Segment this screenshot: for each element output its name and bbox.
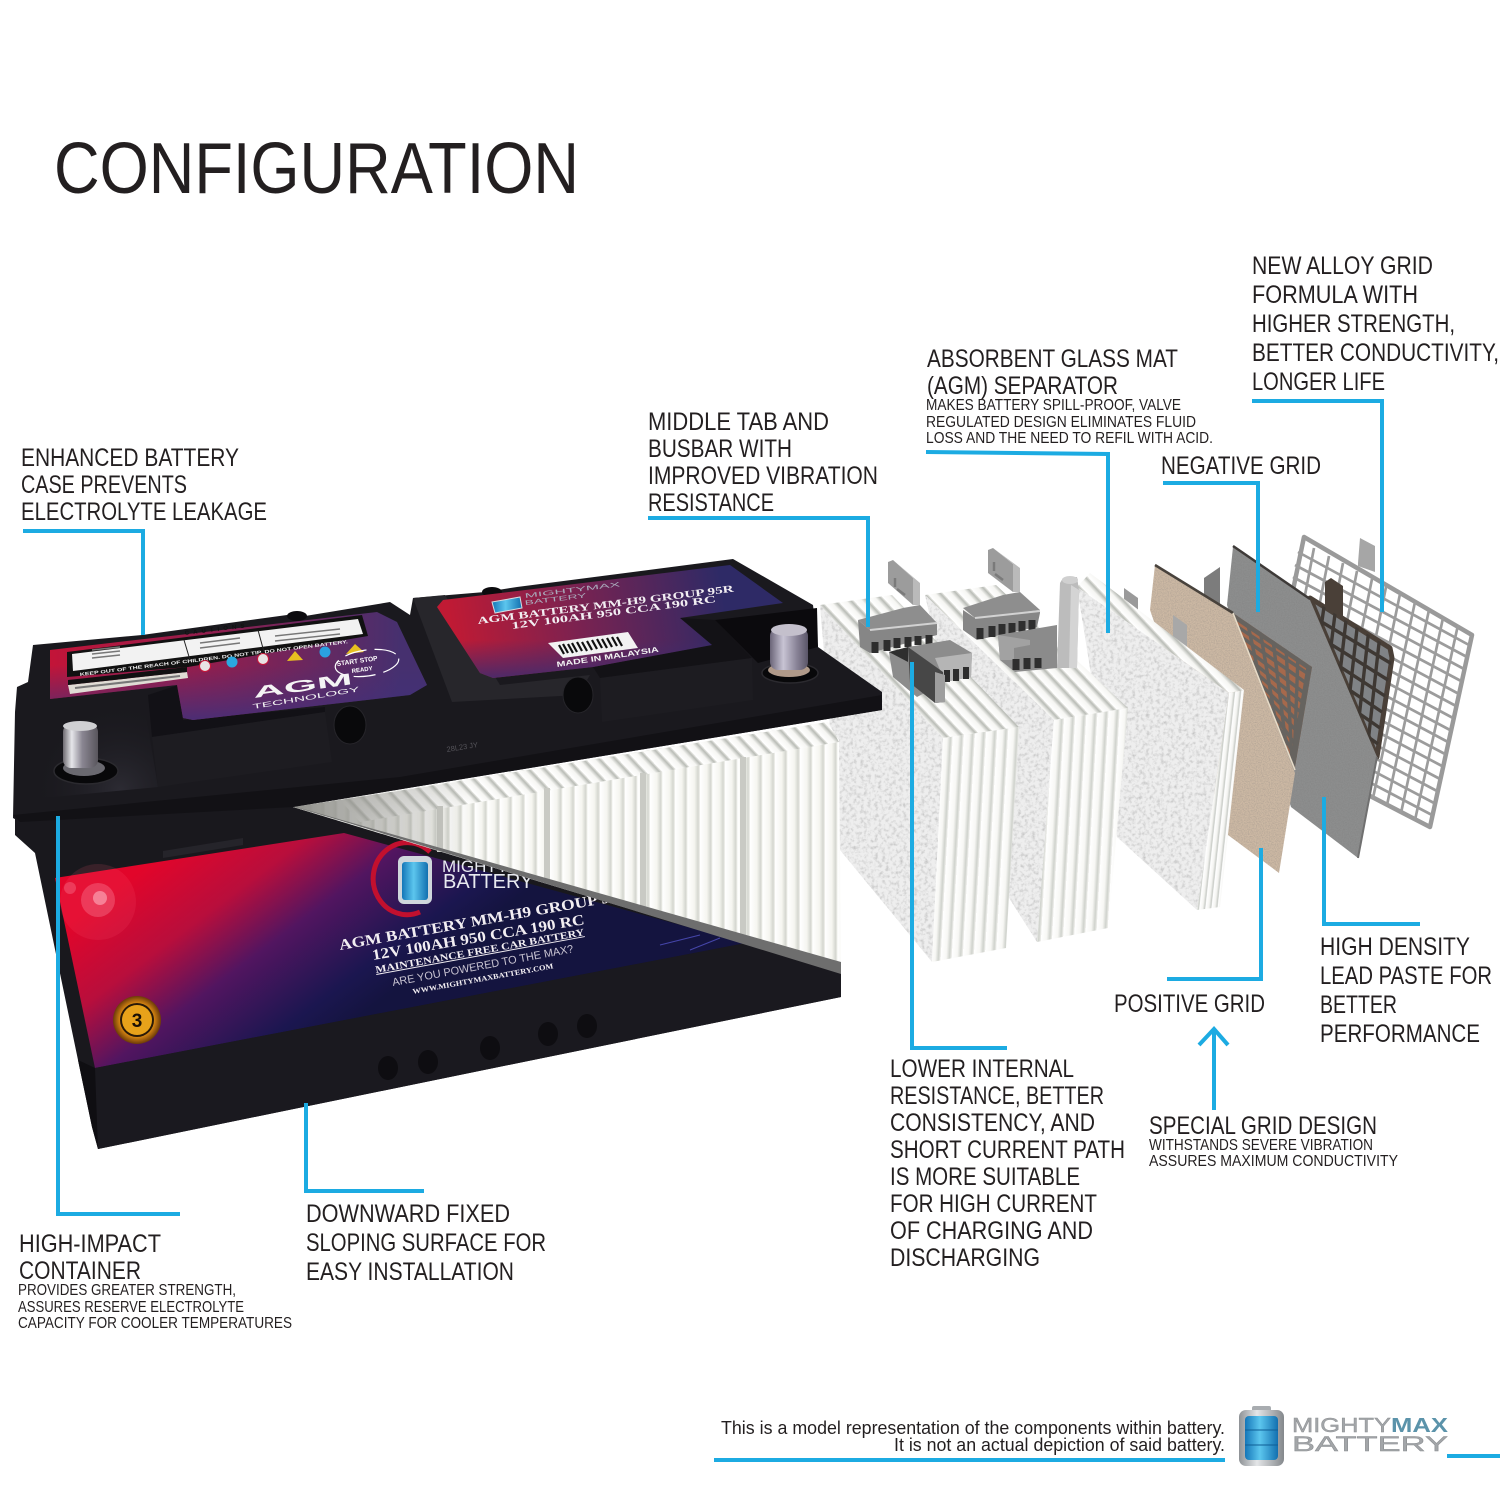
raised box left <box>148 685 332 787</box>
icon: busbar with tall post <box>998 576 1079 672</box>
panel: top left label <box>50 612 427 720</box>
callout: high-impact container: ASSURES RESERVE ELECTROLYTE <box>18 1299 244 1316</box>
callout: new alloy grid formula: HIGHER STRENGTH, <box>1252 310 1455 338</box>
callout: enhanced battery case: CASE PREVENTS <box>21 471 187 499</box>
AGM technology mark: TECHNOLOGY <box>252 686 361 711</box>
icon: battery <box>1239 1406 1284 1466</box>
callout: high density lead paste: BETTER <box>1320 991 1397 1019</box>
callout: high density lead paste: HIGH DENSITY <box>1320 933 1470 961</box>
callout: negative grid: NEGATIVE GRID <box>1161 452 1321 480</box>
callout: lower internal resistance: LOWER INTERNAL <box>890 1055 1074 1083</box>
callout: high-impact container: CAPACITY FOR COOLER TEMPERATURES <box>18 1315 292 1332</box>
icon: start stop ready: START STOP <box>336 655 379 668</box>
right label frame <box>413 595 590 702</box>
callout: middle tab and busbar: MIDDLE TAB AND <box>648 408 829 436</box>
icon: separator tab <box>1124 588 1138 618</box>
callout: downward fixed sloping surface: EASY INSTALLATION <box>306 1258 514 1286</box>
front label text: ARE YOU POWERED TO THE MAX? <box>391 943 574 989</box>
panel: lower ledge with knobs <box>95 943 841 1149</box>
callout: high-impact container: HIGH-IMPACT <box>19 1230 161 1258</box>
callout: new alloy grid formula: NEW ALLOY GRID <box>1252 252 1433 280</box>
raised box right <box>593 608 818 722</box>
callout: lower internal resistance: IS MORE SUITABLE <box>890 1163 1080 1191</box>
footer disclaimer: This is a model representation of the components within battery. <box>721 1418 1225 1438</box>
illustration: AGM battery cutaway <box>13 559 882 1149</box>
callout: enhanced battery case: ENHANCED BATTERY <box>21 444 239 472</box>
front label text: 12V 100AH 950 CCA 190 RC <box>371 912 586 964</box>
icon: front label logo: MIGHTY <box>442 857 508 876</box>
footer disclaimer: It is not an actual depiction of said battery. <box>894 1435 1225 1455</box>
front label text: AGM BATTERY MM-H9 GROUP 95R <box>338 887 632 954</box>
wordmark: MIGHTY <box>1292 1415 1391 1437</box>
icon: rear tab <box>1204 567 1220 606</box>
callout: new alloy grid formula: LONGER LIFE <box>1252 368 1385 396</box>
callout: lower internal resistance: CONSISTENCY, AND <box>890 1109 1095 1137</box>
icon: front label logo <box>373 843 533 915</box>
callout: positive grid <box>1114 848 1265 1018</box>
icon: barcode <box>548 632 638 658</box>
callout: middle tab and busbar: RESISTANCE <box>648 489 774 517</box>
wordmark: MAX <box>1391 1415 1449 1437</box>
icon: lens flare <box>60 864 136 940</box>
callout: middle tab and busbar: BUSBAR WITH <box>648 435 792 463</box>
callout: lower internal resistance: DISCHARGING <box>890 1244 1040 1272</box>
panel: top right label: 12V 100AH 950 CCA 190 RC <box>511 594 717 632</box>
icon: plate block 2 <box>925 585 1128 942</box>
AGM technology mark: AGM <box>252 671 354 702</box>
illustration: exploded cell components <box>820 537 1472 962</box>
panel: front battery label <box>55 833 746 1068</box>
icon: positive grid beige sheet <box>1150 565 1295 873</box>
icon: small logo: BATTERY <box>524 592 588 607</box>
title: CONFIGURATION <box>54 129 579 209</box>
callout: downward fixed sloping surface: SLOPING SURFACE FOR <box>306 1229 546 1257</box>
callout: high density lead paste <box>1320 797 1492 1048</box>
callout: absorbent glass mat separator: ABSORBENT GLASS MAT <box>927 345 1178 373</box>
front label text: WWW.MIGHTYMAXBATTERY.COM <box>412 961 554 996</box>
caution box <box>67 615 368 677</box>
wordmark: BATTERY <box>1292 1433 1448 1456</box>
callout: special grid design: ASSURES MAXIMUM CONDUCTIVITY <box>1149 1153 1398 1170</box>
callout: middle tab and busbar: IMPROVED VIBRATION <box>648 462 878 490</box>
panel: top right label: AGM BATTERY MM-H9 GROUP 95R <box>477 584 736 627</box>
panel: cutaway pleated plates <box>293 722 841 974</box>
callout: new alloy grid formula <box>1252 252 1499 612</box>
callout: high-impact container: PROVIDES GREATER STRENGTH, <box>18 1282 236 1299</box>
callout: negative grid <box>1161 452 1321 612</box>
icon: AGM separator block 3 <box>1077 573 1244 910</box>
icon: warranty badge <box>113 996 161 1044</box>
panel: battery container body <box>15 800 841 1149</box>
callout: lower internal resistance: OF CHARGING AND <box>890 1217 1093 1245</box>
footer disclaimer <box>714 1418 1500 1460</box>
front label text: MAINTENANCE FREE CAR BATTERY <box>375 927 586 976</box>
warning box <box>68 667 188 694</box>
callout: lower internal resistance: FOR HIGH CURRENT <box>890 1190 1097 1218</box>
callout: lower internal resistance: SHORT CURRENT PATH <box>890 1136 1125 1164</box>
icons: safety symbols <box>200 644 364 672</box>
callout: lower internal resistance <box>890 662 1125 1272</box>
icon: dark lead paste grid <box>1305 578 1392 757</box>
caution box: CAUTIONS <box>185 624 245 637</box>
icon: small logo <box>492 581 622 613</box>
icon: small logo: MIGHTYMAX <box>524 581 622 600</box>
panel: battery lid <box>13 559 882 822</box>
front label text <box>338 887 632 996</box>
callout: high-impact container <box>18 816 292 1332</box>
callout: positive grid: POSITIVE GRID <box>1114 990 1265 1018</box>
icon: start stop ready <box>334 646 400 680</box>
callout: absorbent glass mat separator: (AGM) SEPARATOR <box>927 372 1118 400</box>
caution box: KEEP OUT OF THE REACH OF CHILDREN. DO NOT TIP. DO NOT OPEN BATTERY. <box>80 639 348 677</box>
icon: negative grid sheet <box>1227 546 1377 858</box>
callout: lower internal resistance: RESISTANCE, BETTER <box>890 1082 1104 1110</box>
icon: screws <box>287 587 593 744</box>
icon: busbar left <box>858 560 937 653</box>
callout: absorbent glass mat separator: MAKES BATTERY SPILL-PROOF, VALVE <box>926 397 1181 414</box>
panel: top right label <box>437 565 783 678</box>
icon: wire mesh alloy grid <box>1262 537 1472 827</box>
callout: enhanced battery case <box>21 444 267 635</box>
wordmark <box>1292 1415 1449 1456</box>
callout: downward fixed sloping surface: DOWNWARD FIXED <box>306 1200 510 1228</box>
callout: special grid design: WITHSTANDS SEVERE VIBRATION <box>1149 1137 1373 1154</box>
AGM technology mark <box>252 671 361 711</box>
callout: downward fixed sloping surface <box>306 1103 546 1286</box>
icon: left terminal <box>54 721 118 784</box>
callout: absorbent glass mat separator: REGULATED DESIGN ELIMINATES FLUID <box>926 414 1196 431</box>
icon: brown paste grid <box>1233 613 1312 767</box>
panel: battery lid: 28L23 JY <box>446 740 479 754</box>
callout: absorbent glass mat separator: LOSS AND THE NEED TO REFIL WITH ACID. <box>926 430 1213 447</box>
icon: warranty badge: 3 <box>132 1011 142 1032</box>
callout: special grid design <box>1149 1112 1398 1170</box>
logo: MightyMax Battery <box>1239 1406 1449 1466</box>
callout: special grid design: SPECIAL GRID DESIGN <box>1149 1112 1377 1140</box>
callout: new alloy grid formula: FORMULA WITH <box>1252 281 1418 309</box>
icon: plate block 1 <box>820 595 1019 962</box>
panel: top right label: MADE IN MALAYSIA <box>556 645 660 669</box>
icon: start stop ready: READY <box>351 666 373 675</box>
icon: busbar rear <box>963 548 1040 640</box>
icon: busbar front <box>889 640 972 703</box>
arrow: special grid to positive grid <box>1199 1029 1228 1110</box>
icon: right terminal <box>762 624 818 683</box>
callout: high-impact container: CONTAINER <box>19 1257 141 1285</box>
callout: middle tab and busbar <box>648 408 878 627</box>
callout: enhanced battery case: ELECTROLYTE LEAKAGE <box>21 498 267 526</box>
callout: absorbent glass mat separator <box>926 345 1213 633</box>
icon: front label logo: BATTERY <box>443 871 533 893</box>
